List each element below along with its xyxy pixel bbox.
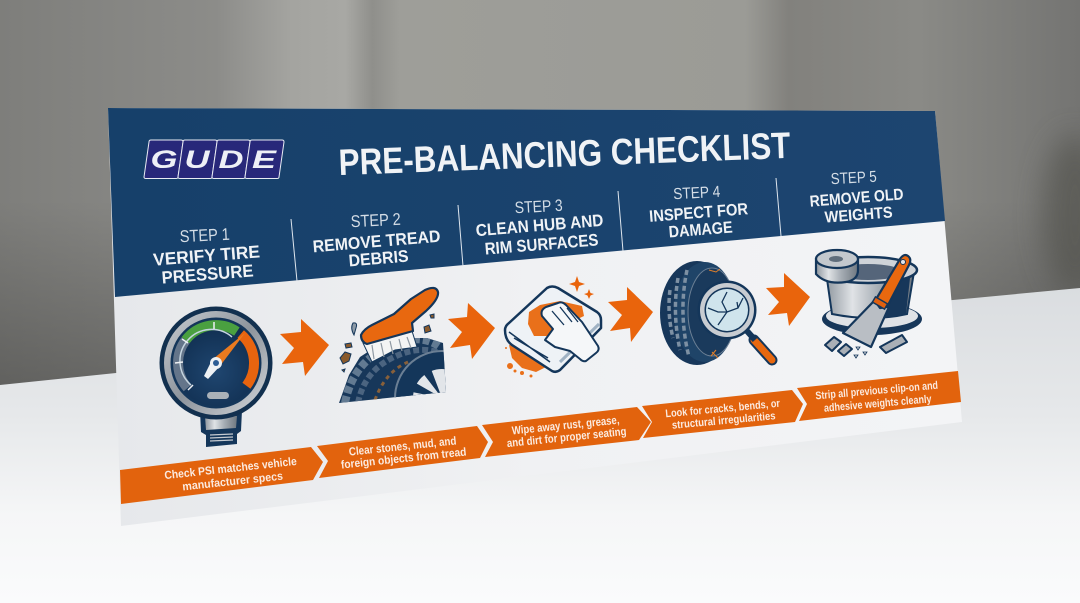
panel: checklist card xyxy=(108,108,962,526)
rim top xyxy=(819,257,917,283)
step 3 heading: RIM SURFACES xyxy=(484,230,599,259)
icon: rim with scraper xyxy=(816,250,922,358)
rim barrel xyxy=(826,272,914,318)
step 5 heading: REMOVE OLD xyxy=(809,186,904,211)
arrow 3 xyxy=(608,287,653,342)
icon: cloth and glove xyxy=(505,276,601,378)
logo letters: G xyxy=(150,146,178,174)
scraper handle xyxy=(875,255,910,308)
cloth xyxy=(505,286,601,372)
arrow 4 xyxy=(766,273,810,326)
step 2 heading: DEBRIS xyxy=(348,247,409,270)
icon: pressure gauge xyxy=(160,306,272,447)
banner 5 xyxy=(797,371,961,421)
logo letters: E xyxy=(252,146,278,174)
tire xyxy=(660,261,734,365)
banner 1: manufacturer specs xyxy=(182,471,284,493)
step 2 heading xyxy=(312,210,441,270)
step 4 heading: DAMAGE xyxy=(668,219,733,241)
step 3 heading: CLEAN HUB AND xyxy=(475,211,604,240)
step dividers xyxy=(291,178,781,281)
scraper blade xyxy=(843,301,889,347)
gauge needle xyxy=(213,333,245,366)
banner 4: Look for cracks, bends, or xyxy=(665,398,781,420)
banner 3: and dirt for proper seating xyxy=(506,426,627,450)
banner 3: Wipe away rust, grease, xyxy=(511,415,620,437)
step 5 heading: WEIGHTS xyxy=(824,204,893,227)
banner 2: foreign objects from tread xyxy=(340,446,467,472)
surface cracks xyxy=(709,269,720,358)
step 2 heading: REMOVE TREAD xyxy=(312,227,441,256)
magnifier lens xyxy=(698,280,756,340)
banner 4: structural irregularities xyxy=(671,410,776,432)
gauge stem xyxy=(200,410,242,447)
step 5 heading xyxy=(809,169,904,227)
step 2 heading: STEP 2 xyxy=(350,210,401,231)
brush handle xyxy=(361,288,438,344)
step 5 heading: STEP 5 xyxy=(830,169,877,188)
step 4 heading xyxy=(649,184,749,241)
banner 2 xyxy=(317,426,488,478)
magnifier neck xyxy=(747,331,755,340)
glove xyxy=(542,302,599,361)
logo tiles xyxy=(144,140,284,178)
title: PRE-BALANCING CHECKLIST xyxy=(338,125,791,183)
dark blurred shape on wall xyxy=(1043,135,1080,295)
banner 5: Strip all previous clip-on and xyxy=(815,380,939,402)
removed weights xyxy=(825,335,907,356)
stain xyxy=(528,301,584,336)
arrow 2 xyxy=(448,303,495,359)
banner 5: adhesive weights cleanly xyxy=(823,393,933,415)
arrow 1 xyxy=(280,319,329,376)
step 1 heading: VERIFY TIRE xyxy=(152,241,261,270)
step 1 heading: STEP 1 xyxy=(179,225,230,246)
debris xyxy=(340,314,434,372)
gauge readout xyxy=(207,392,229,399)
banner 4 xyxy=(642,390,803,438)
icon: tire with magnifier xyxy=(660,261,772,365)
lens cracks xyxy=(708,292,743,325)
gauge scale arcs xyxy=(178,325,254,388)
logo: GUDE xyxy=(144,140,284,178)
banner 2: Clear stones, mud, and xyxy=(348,435,457,459)
step 1 heading xyxy=(152,225,261,288)
banner 3 xyxy=(482,407,651,457)
brush bristles xyxy=(363,331,417,362)
logo letters: U xyxy=(184,146,211,174)
step 3 heading xyxy=(475,197,604,259)
header band xyxy=(108,108,945,297)
step 4 heading: INSPECT FOR xyxy=(649,200,749,226)
icon: brush on tire xyxy=(339,286,446,403)
wall shading xyxy=(0,0,1080,400)
magnifier handle xyxy=(754,340,772,360)
gauge body xyxy=(160,306,272,420)
table surface xyxy=(0,288,1080,603)
banner 1 xyxy=(120,447,323,504)
card base xyxy=(108,108,962,526)
step 4 heading: STEP 4 xyxy=(673,184,721,203)
tire tread xyxy=(339,338,446,403)
banner 1: Check PSI matches vehicle xyxy=(164,456,297,482)
hub cylinder xyxy=(816,259,858,283)
logo letters: D xyxy=(218,146,244,174)
logo letters xyxy=(150,146,278,174)
step 1 heading: PRESSURE xyxy=(161,260,254,288)
background wall xyxy=(0,0,1080,400)
splatter xyxy=(509,345,548,372)
step 3 heading: STEP 3 xyxy=(514,197,563,217)
sparkles xyxy=(569,276,585,292)
rim base xyxy=(822,303,922,335)
